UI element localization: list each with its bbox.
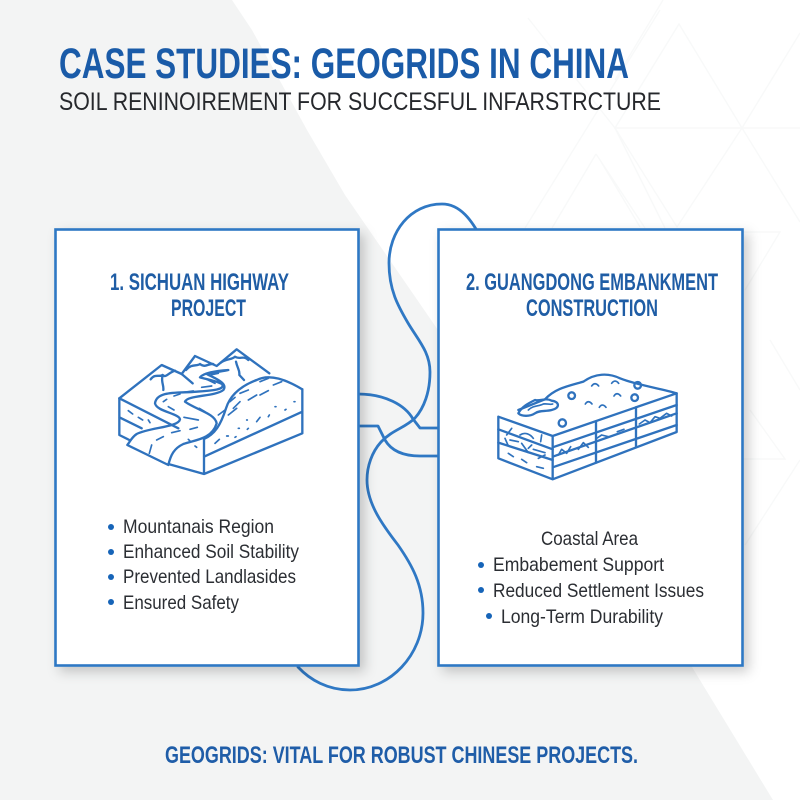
heading: Sichuan highway project: 1. SICHUAN HIGHWAY <box>110 269 289 296</box>
panel: Guangdong embankment construction <box>438 230 742 666</box>
list: Guangdong outcomes <box>478 528 704 628</box>
list: Sichuan outcomes: Ensured Safety <box>123 592 239 614</box>
icon: layered embankment block <box>498 375 677 479</box>
list: Guangdong outcomes: Embabement Support <box>493 554 665 576</box>
heading: Sichuan highway project <box>110 269 289 322</box>
panel: Sichuan highway project <box>56 230 358 666</box>
subtitle: SOIL RENINOIREMENT FOR SUCCESFUL INFARSTRCTURE <box>59 88 661 116</box>
list: Guangdong outcomes: Coastal Area <box>541 528 638 550</box>
heading: Guangdong embankment construction: CONSTRUCTION <box>526 295 658 322</box>
list: Sichuan outcomes: Prevented Landlasides <box>123 566 296 588</box>
list: Sichuan outcomes: Enhanced Soil Stability <box>123 541 299 563</box>
connector: curving lines between cards <box>298 204 482 690</box>
list: Guangdong outcomes: Long-Term Durability <box>501 606 663 628</box>
list: Sichuan outcomes: Mountanais Region <box>123 516 274 538</box>
footer takeaway: GEOGRIDS: VITAL FOR ROBUST CHINESE PROJECTS. <box>165 742 638 769</box>
list: Sichuan outcomes <box>108 516 299 614</box>
icon: mountain road terrain block <box>119 349 302 474</box>
heading: Sichuan highway project: PROJECT <box>171 295 246 322</box>
heading: Guangdong embankment construction <box>466 269 718 322</box>
list: Guangdong outcomes: Reduced Settlement Issues <box>493 580 704 602</box>
